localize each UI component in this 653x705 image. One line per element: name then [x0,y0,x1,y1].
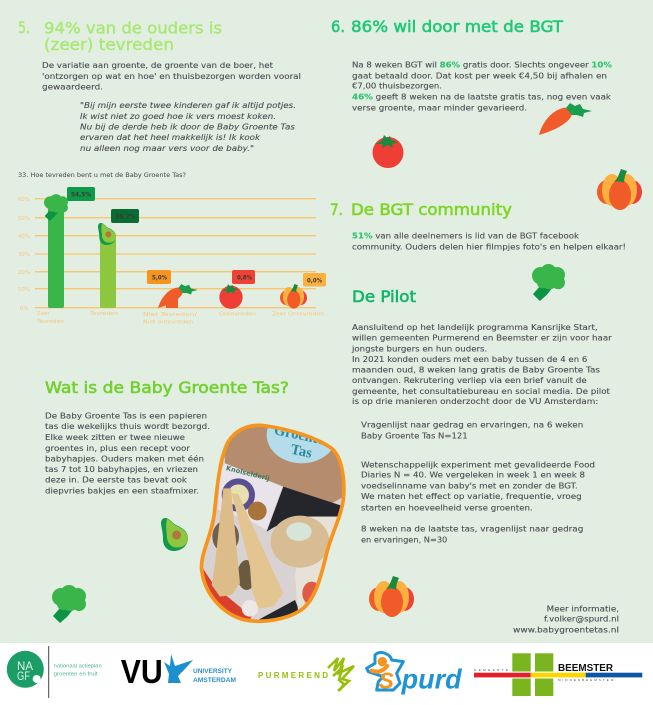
text: section 7 [352,232,626,252]
text: method 1: Vragenlijst naar gedrag en ervaringen, na 6 weken [361,420,584,429]
text: method 2 [361,460,595,512]
text: method 2: voedselinname van baby's met en zonder de BGT. [361,481,578,490]
badge 0,0% [303,273,326,286]
bar chart: satisfaction [18,172,326,326]
text: wat is de BGT: deze in. De eerste tas bevat ook [45,476,188,485]
logo: Beemster: BEEMSTER [558,663,614,674]
logo: Purmerend: PURMEREND [258,671,328,680]
badge 5,0% [147,270,171,284]
text: wat is de BGT: Elke week zitten er twee nieuwe [45,433,185,442]
text: section 7: 51% van alle deelnemers is lid van de BGT facebook [352,232,580,241]
photo: groente tas contents in orange blob: Knolselderij [225,464,270,483]
heading: section 5: (zeer) tevreden [44,35,174,54]
photo: groente tas contents in orange blob: Tas [289,442,314,462]
text: section 5 intro: gewaardeerd. [42,82,103,92]
text: method 1 [361,420,584,440]
bar: niet tevreden [166,298,178,308]
footer: logo strip [0,643,653,705]
bar: tevreden [100,238,116,308]
x axis labels: Zeer [37,311,50,317]
logo: Spurd [367,653,463,694]
text: section 6: gaat betaald door. Dat kost per week €4,50 bij afhalen en [352,72,607,80]
text: de pilot: In 2021 konden ouders met een baby tussen de 4 en 6 [352,355,587,364]
text: method 2: We maten het effect op variatie, frequentie, vroeg [361,492,582,501]
text: section 6: verse groente, maar minder gevarieerd. [352,104,527,113]
text: contact: f.volker@spurd.nl [544,614,619,623]
text: method 3: en ervaringen, N=30 [361,535,447,544]
icon: carrot [539,103,592,135]
logo: NAGF: groenten en fruit [54,672,98,678]
text: section 6: €7,00 thuisbezorgen. [352,82,442,91]
text: method 2: Diaries N = 40. We vergeleken in week 1 en week 8 [361,471,585,480]
y axis labels: 30% [18,252,30,258]
logo: Beemster: GEMEENTE [474,668,508,672]
y axis labels: 10% [18,287,30,293]
y axis labels: 40% [18,234,30,240]
text: wat is de BGT: diepvries bakjes en een staafmixer. [45,486,199,495]
text: method 2: Wetenschappelijk experiment met gevalideerde Food [361,460,595,469]
text: de pilot: Aansluitend op het landelijk programma Kansrijke Start, [352,323,598,332]
logo: Spurd: purd [401,663,463,694]
icon: broccoli bottom left [52,585,86,623]
text: wat is de BGT: De Baby Groente Tas is een papieren [45,412,207,421]
text: de pilot: maanden oud, 8 weken lang gratis de Baby Groente Tas [352,365,600,374]
text: de pilot: jongste burgers en hun ouders. [351,344,487,353]
text: section 5 intro: De variatie aan groente, de groente van de boer, het [42,61,273,70]
text: contact: Meer informatie, [547,604,619,613]
text: wat is de BGT [45,412,210,495]
icon: tomato on chart [219,284,243,309]
text: section 6 [352,60,612,113]
quote: "Bij mijn eerste twee kinderen gaf ik altijd potjes. [80,101,296,110]
heading: section 6: 6. [331,17,345,36]
photo: groente tas contents in orange blob: Groente [272,422,326,449]
badge 54,5% [67,187,95,201]
text: method 2: starten en hoeveelheid verse groenten. [361,503,533,512]
icon: tomato [372,135,404,168]
badge 0,0%: 0,0% [307,278,322,284]
text: method 3: 8 weken na de laatste tas, vragenlijst naar gedrag [361,524,583,533]
text: section 6: Na 8 weken BGT wil 86% gratis door. Slechts ongeveer 10% [352,60,612,70]
text: method 1: Baby Groente Tas N=121 [361,431,468,440]
text: contact: www.babygroentetas.nl [513,625,619,634]
y axis labels: 50% [18,216,30,222]
icon: avocado on bar [98,223,116,245]
logo: VU: UNIVERSITY [193,668,233,675]
logo: Purmerend [258,658,354,691]
text: method 3 [361,524,583,544]
text: wat is de BGT: tas die wekelijks thuis wordt bezorgd. [45,422,210,431]
badge 0,8% [232,270,255,284]
heading: wat is de baby groente tas: Wat is de Baby Groente Tas? [45,378,289,397]
y axis labels: 0% [20,306,29,312]
text: section 6: 46% geeft 8 weken na de laatste gratis tas, nog even vaak [352,93,612,102]
text: section 5 intro [42,61,301,92]
quote: Nu bij de derde heb ik door de Baby Groente Tas [80,122,295,132]
x axis labels: Tevreden [89,311,118,317]
icon: avocado [161,518,188,551]
badge 54,5%: 54,5% [71,192,91,198]
text: de pilot: ontvangen. Rekrutering verliep via een brief vanuit de [352,376,587,385]
icon: carrot on chart [158,284,198,308]
y axis labels [18,197,30,312]
text: de pilot [351,323,613,406]
text: contact [513,604,619,634]
quote: nu alleen nog maar vers voor de baby." [80,144,254,153]
text: section 5 intro: 'ontzorgen op wat en hoe' en thuisbezorgen worden vooral [42,72,301,81]
quote [80,101,296,153]
x axis labels: Tevreden [36,319,64,325]
icon: pumpkin on chart [280,284,307,309]
heading: section 7: 7. [330,200,343,219]
heading: section 5 [18,18,222,54]
badge 39,7% [111,209,139,223]
icon: pumpkin [597,169,642,210]
icon: pumpkin bottom [369,576,414,617]
text: section 7: community. Ouders delen hier filmpjes foto's en helpen elkaar! [352,243,626,252]
quote: ervaren dat het heel makkelijk is! Ik kook [80,133,261,142]
logo: Beemster: MIDDENBEEMSTER [558,678,614,682]
heading: section 6: 86% wil door met de BGT [351,17,563,36]
logo: Beemster [474,653,642,696]
logo: Spurd: S [379,667,394,693]
x axis labels: Niet Tevreden/ [143,312,197,318]
photo: groente tas contents in orange blob [200,424,346,624]
heading: section 5: 94% van de ouders is [44,18,222,38]
x axis labels [36,311,324,326]
logo: VU: AMSTERDAM [193,677,236,684]
badge 5,0%: 5,0% [152,274,167,282]
text: de pilot: willen gemeenten Purmerend en Beemster er zijn voor haar [352,333,613,342]
badge 0,8%: 0,8% [237,274,252,282]
badge 39,7%: 39,7% [116,214,136,220]
logo: NAGF [7,646,102,698]
heading: de pilot: De Pilot [352,287,416,306]
logo: NAGF: GF [17,669,30,683]
quote: Ik wist niet zo goed hoe ik vers moest koken. [80,112,276,121]
icon: broccoli on bar [44,194,68,221]
logo: VU [121,653,236,690]
logo: NAGF: NA [17,659,33,673]
x axis labels: Ontevreden [219,312,256,318]
bar: zeer tevreden [48,208,64,308]
logo: NAGF: nationaal actieplan [54,664,102,670]
chart title: 33. Hoe tevreden bent u met de Baby Groente Tas? [18,172,186,179]
text: de pilot: gemeente, het consultatiebureau en social media. De pilot [352,387,610,396]
y axis labels: 20% [18,270,30,276]
text: wat is de BGT: tas 7 tot 10 babyhapjes, en vriezen [45,465,198,474]
logo: VU: VU [121,653,163,690]
text: de pilot: is op drie manieren onderzocht door de VU Amsterdam: [352,397,598,406]
text: wat is de BGT: groentes in, plus een recept voor [45,444,191,453]
y axis labels: 60% [18,197,30,203]
x axis labels: Niet ontevreden [143,320,193,326]
heading: section 5: 5. [18,18,30,37]
text: wat is de BGT: babyhapjes. Ouders maken met één [45,455,204,464]
icon: broccoli right [532,264,565,301]
x axis labels: Zeer Ontevreden [272,312,324,318]
heading: section 7: De BGT community [351,200,512,219]
